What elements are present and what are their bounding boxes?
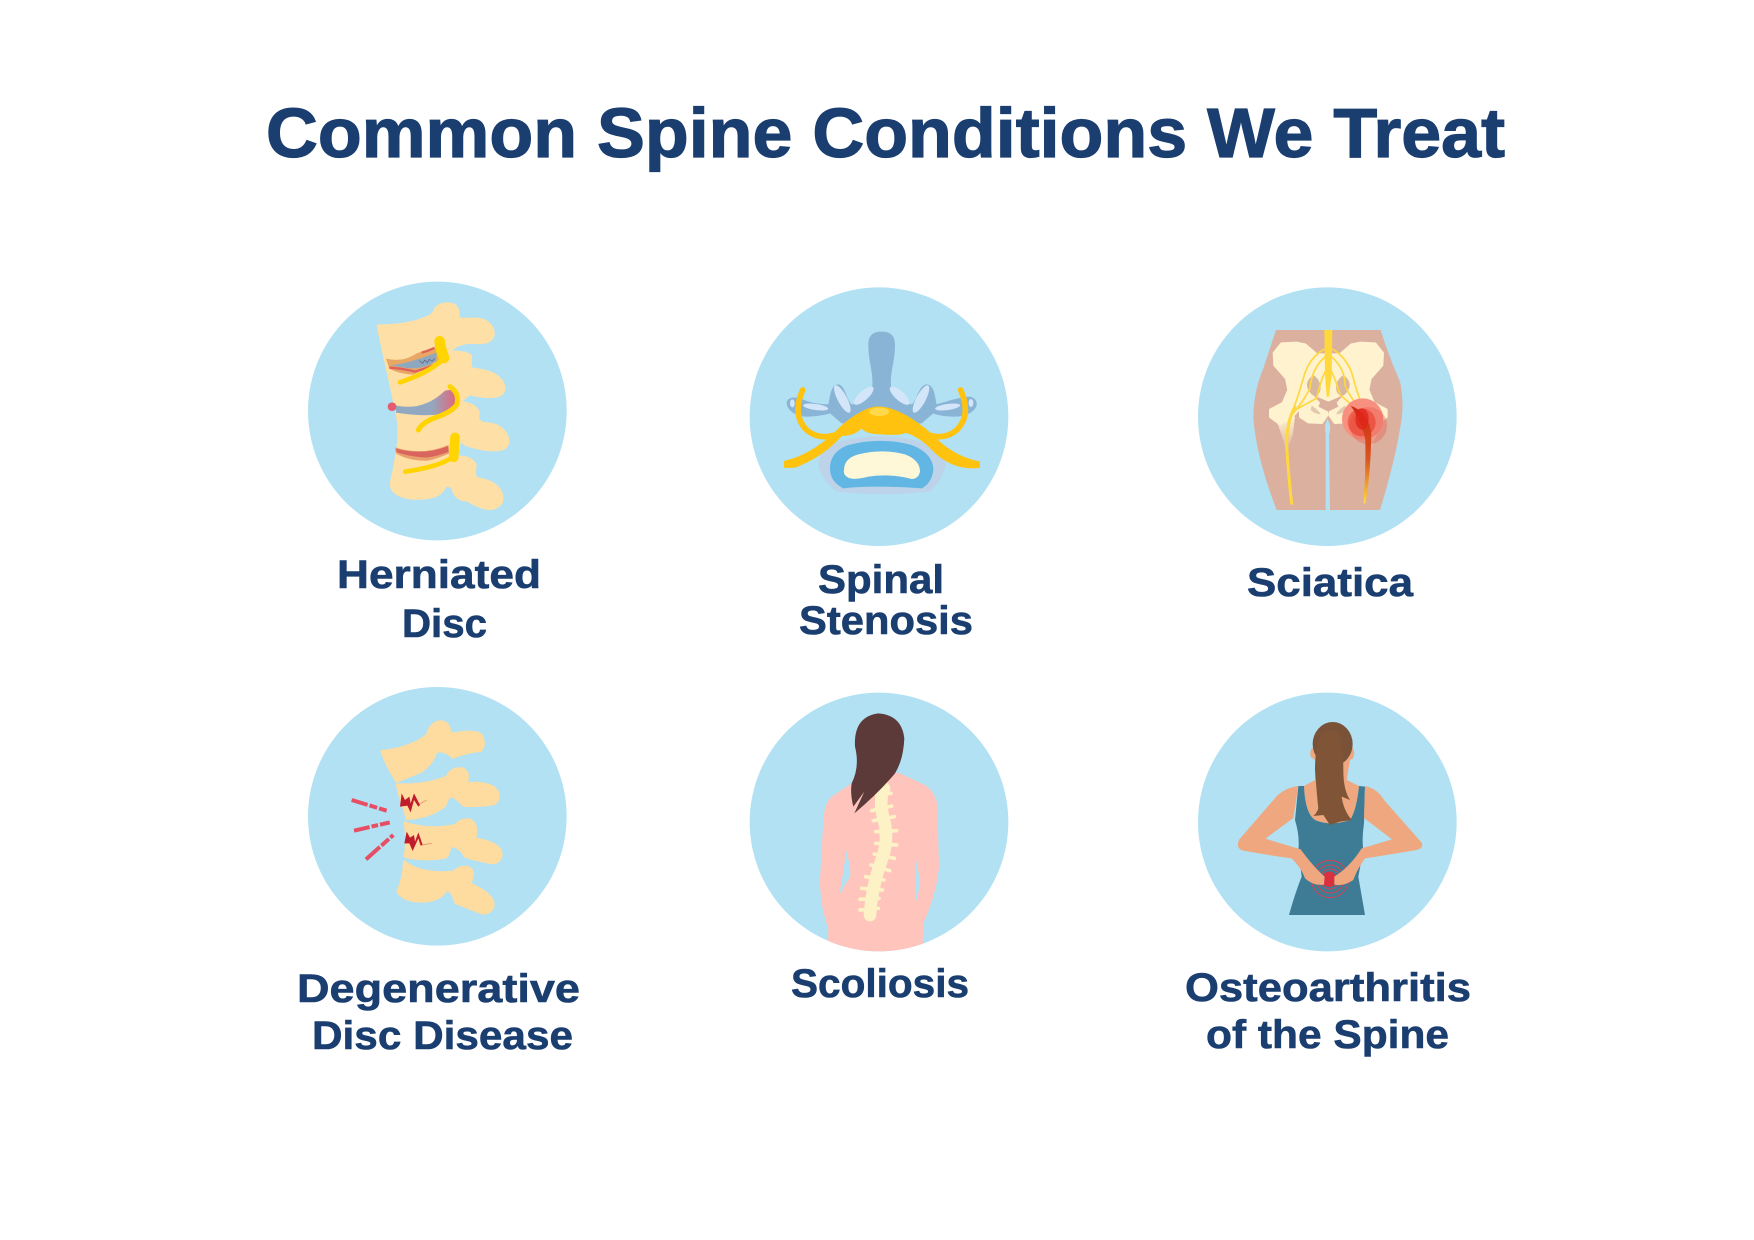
icon: woman holding lower back (1198, 693, 1457, 951)
label: Herniated Disc: Disc (402, 602, 487, 646)
icon: woman's back with curved spine (750, 693, 1008, 957)
label: Scoliosis: Scoliosis (791, 962, 969, 1006)
label: Spinal Stenosis (799, 558, 973, 643)
label: Sciatica: Sciatica (1247, 561, 1414, 605)
label: Spinal Stenosis: Spinal (818, 558, 944, 602)
label: Osteoarthritis of the Spine (1185, 966, 1471, 1057)
panel: osteoarthritis of the spine (1185, 693, 1471, 1057)
panel: spinal stenosis (750, 287, 1008, 643)
panel: scoliosis (750, 693, 1008, 1006)
icon: degenerating vertebrae (308, 687, 567, 946)
panel: herniated disc (308, 282, 567, 646)
label: Osteoarthritis of the Spine: Osteoarthritis (1185, 966, 1471, 1010)
icon: pelvis with sciatic nerve (1198, 287, 1457, 546)
label: Degenerative Disc Disease: Degenerative (297, 967, 580, 1011)
panel: sciatica (1198, 287, 1457, 605)
icon: herniated disc spine (308, 282, 567, 540)
label: Herniated Disc: Herniated (337, 553, 541, 597)
label: Herniated Disc (337, 553, 541, 646)
title: Common Spine Conditions We Treat (266, 94, 1505, 172)
label: Degenerative Disc Disease: Disc Disease (312, 1014, 573, 1058)
icon: vertebra cross-section (750, 287, 1008, 546)
label: Osteoarthritis of the Spine: of the Spine (1206, 1013, 1449, 1057)
label: Spinal Stenosis: Stenosis (799, 599, 973, 643)
label: Degenerative Disc Disease (297, 967, 580, 1058)
panel: degenerative disc disease (297, 687, 580, 1058)
